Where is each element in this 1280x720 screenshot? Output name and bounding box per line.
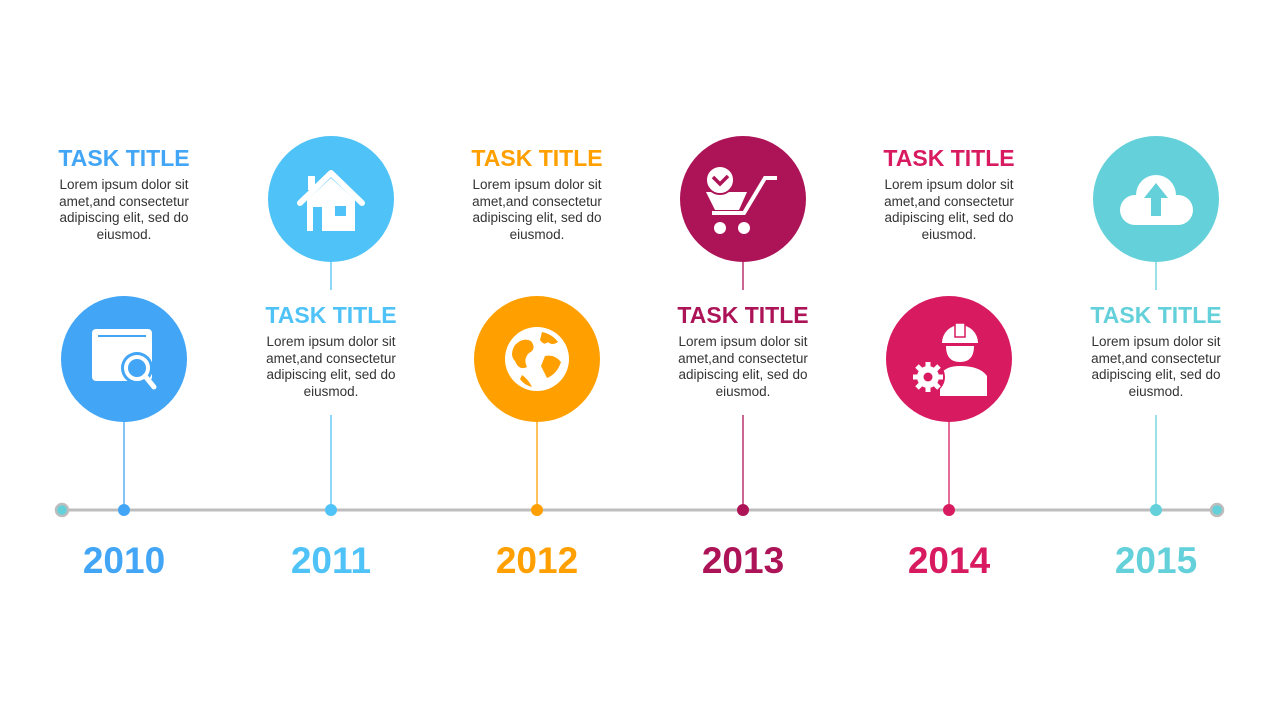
- milestone 2011: [265, 136, 397, 581]
- text: task 2015: [1090, 302, 1222, 399]
- milestone 2012: [471, 145, 603, 581]
- icon: box search: [61, 296, 187, 422]
- milestone 2011: 2011: [291, 540, 371, 581]
- text: task 2011: adipiscing elit, sed do: [266, 367, 396, 382]
- icon: cart: [680, 136, 806, 262]
- text: task 2013: adipiscing elit, sed do: [678, 367, 808, 382]
- milestone 2010: 2010: [83, 540, 165, 581]
- text: task 2010: TASK TITLE: [58, 145, 190, 171]
- text: task 2015: eiusmod.: [1129, 384, 1183, 399]
- text: task 2013: [677, 302, 809, 399]
- text: task 2015: TASK TITLE: [1090, 302, 1222, 328]
- text: task 2014: [883, 145, 1015, 242]
- text: task 2011: eiusmod.: [304, 384, 358, 399]
- text: task 2011: amet,and consectetur: [266, 351, 396, 366]
- text: task 2012: eiusmod.: [510, 227, 564, 242]
- text: task 2013: Lorem ipsum dolor sit: [678, 334, 808, 349]
- milestone 2014: [883, 145, 1015, 581]
- text: task 2011: Lorem ipsum dolor sit: [266, 334, 396, 349]
- text: task 2013: eiusmod.: [716, 384, 770, 399]
- text: task 2014: TASK TITLE: [883, 145, 1015, 171]
- milestone 2013: 2013: [702, 540, 784, 581]
- milestone 2014: 2014: [908, 540, 991, 581]
- milestone 2015: [1090, 136, 1222, 581]
- text: task 2013: TASK TITLE: [677, 302, 809, 328]
- text: task 2010: amet,and consectetur: [59, 194, 189, 209]
- icon: engineer with gear: [886, 296, 1012, 422]
- text: task 2012: TASK TITLE: [471, 145, 603, 171]
- text: task 2014: adipiscing elit, sed do: [884, 210, 1014, 225]
- text: task 2015: adipiscing elit, sed do: [1091, 367, 1221, 382]
- text: task 2010: eiusmod.: [97, 227, 151, 242]
- text: task 2012: amet,and consectetur: [472, 194, 602, 209]
- text: task 2010: adipiscing elit, sed do: [59, 210, 189, 225]
- text: task 2014: eiusmod.: [922, 227, 976, 242]
- icon: cloud upload: [1093, 136, 1219, 262]
- text: task 2011: TASK TITLE: [265, 302, 397, 328]
- text: task 2012: adipiscing elit, sed do: [472, 210, 602, 225]
- milestone 2013: [677, 136, 809, 581]
- text: task 2010: Lorem ipsum dolor sit: [59, 177, 189, 192]
- text: task 2012: [471, 145, 603, 242]
- text: task 2011: [265, 302, 397, 399]
- text: task 2015: Lorem ipsum dolor sit: [1091, 334, 1221, 349]
- icon: globe: [474, 296, 600, 422]
- text: task 2010: [58, 145, 190, 242]
- text: task 2015: amet,and consectetur: [1091, 351, 1221, 366]
- timeline axis: [56, 504, 1223, 516]
- milestone 2012: 2012: [496, 540, 578, 581]
- text: task 2012: Lorem ipsum dolor sit: [472, 177, 602, 192]
- icon: house: [268, 136, 394, 262]
- milestone 2010: [58, 145, 190, 581]
- text: task 2013: amet,and consectetur: [678, 351, 808, 366]
- text: task 2014: amet,and consectetur: [884, 194, 1014, 209]
- text: task 2014: Lorem ipsum dolor sit: [884, 177, 1014, 192]
- milestone 2015: 2015: [1115, 540, 1197, 581]
